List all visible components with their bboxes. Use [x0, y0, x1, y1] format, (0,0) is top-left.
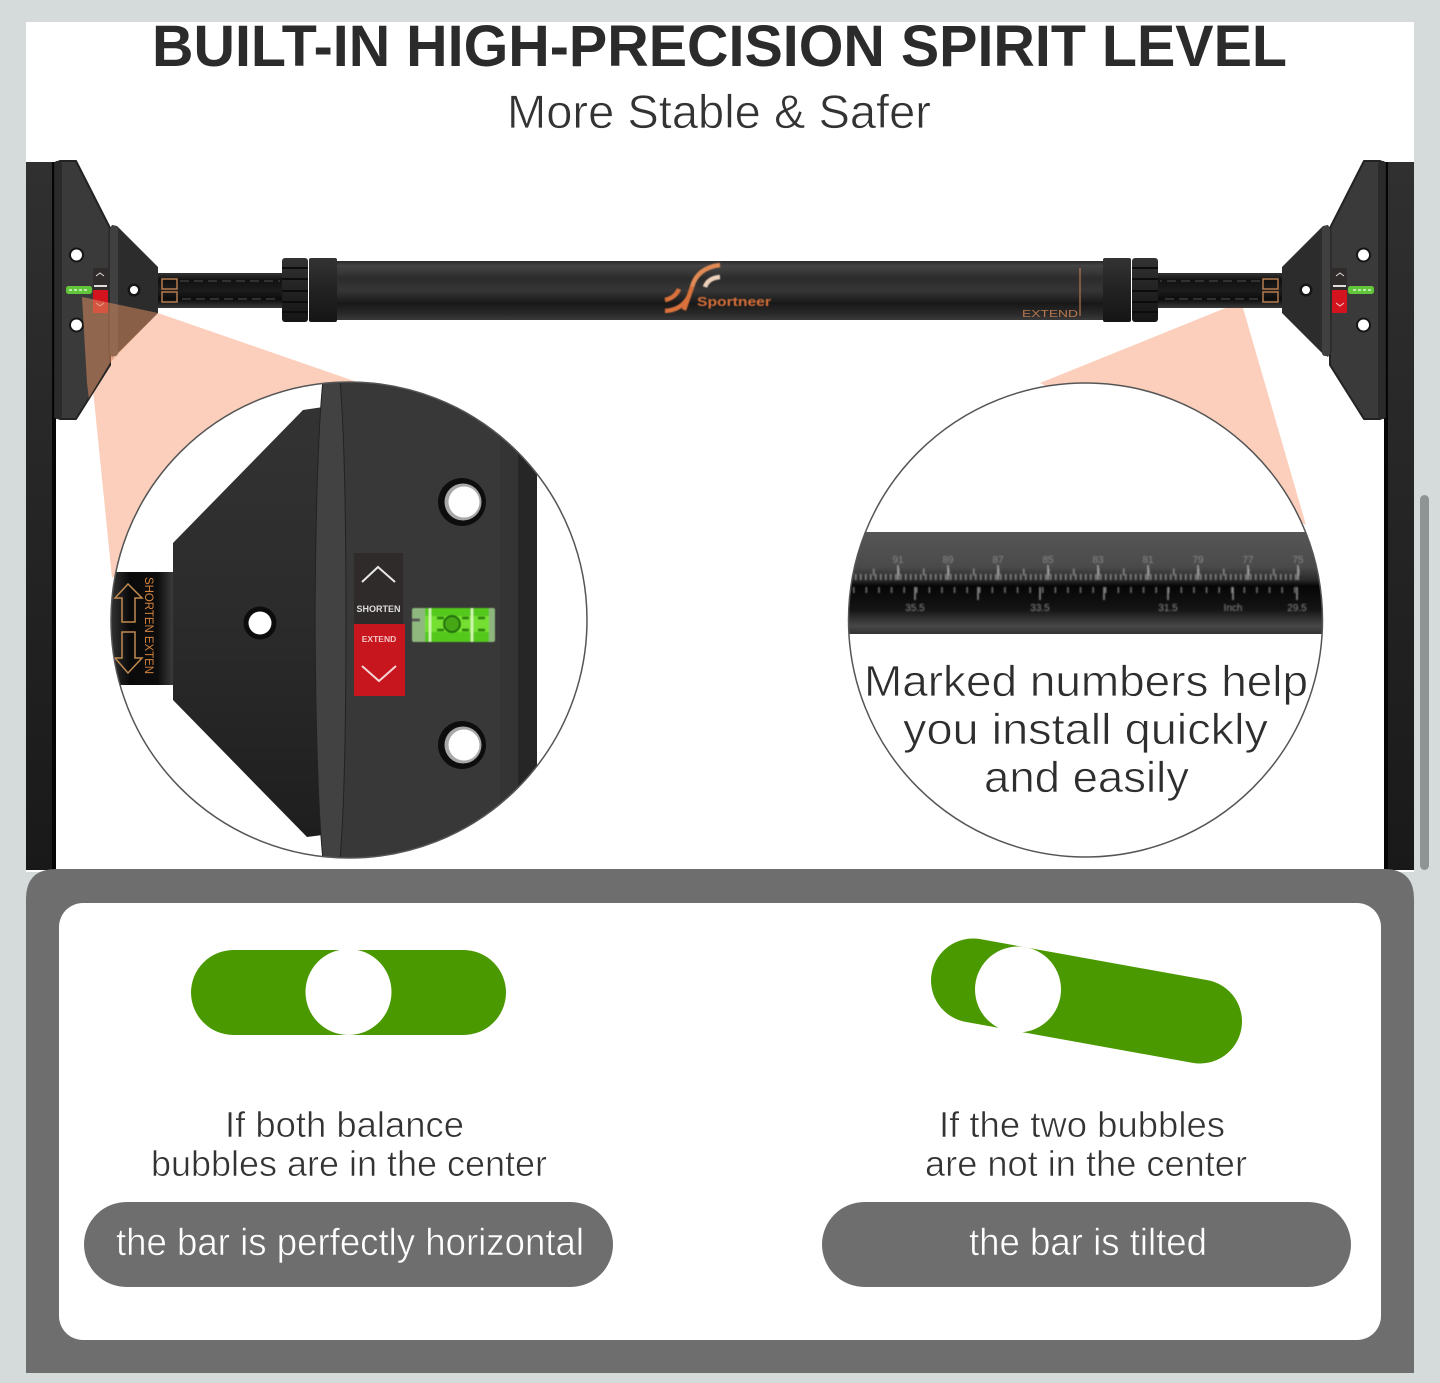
cone: [173, 406, 330, 837]
magnifier caption: and easily: [984, 753, 1189, 802]
icon: level bubble centred: [191, 949, 506, 1035]
left rod and collar: [158, 258, 337, 322]
shorten label: [354, 553, 403, 624]
ruler ticks: [850, 565, 1300, 600]
ruler upper scale: 87: [992, 555, 1004, 566]
panel: left magnifier: [110, 380, 587, 860]
ruler lower scale: 29.5: [1287, 603, 1307, 614]
text: tilted condition: If the two bubbles: [939, 1104, 1225, 1145]
brand logo: Sportneer: [697, 294, 771, 309]
extend label: EXTEND: [362, 634, 396, 644]
result pill: tilted: [822, 1202, 1351, 1287]
ruler upper scale: 91: [892, 555, 904, 566]
text: balanced condition: bubbles are in the center: [151, 1143, 547, 1184]
ruler lower scale: Inch: [1224, 603, 1242, 614]
mount plate: [340, 382, 500, 858]
ruler upper scale: 81: [1142, 555, 1154, 566]
extend label: [354, 624, 405, 696]
pull-up bar: [26, 161, 1414, 870]
right wall mount: [1282, 161, 1414, 870]
centre hole: [244, 606, 276, 640]
left wall mount: [26, 161, 158, 870]
scrollbar: [1420, 495, 1429, 870]
ruler upper scale: 77: [1242, 555, 1254, 566]
ruler upper scale: 75: [1292, 555, 1304, 566]
ruler upper scale: 85: [1042, 555, 1054, 566]
ruler tube: [845, 532, 1327, 634]
ruler lower scale: [905, 603, 1308, 612]
magnifier caption: Marked numbers help: [864, 657, 1308, 706]
rod in magnifier: SHORTEN EXTEN: [142, 577, 156, 674]
rod in magnifier: [110, 572, 176, 685]
ruler lower scale: 31.5: [1158, 603, 1178, 614]
text: tilted condition: are not in the center: [925, 1143, 1247, 1184]
ruler upper scale: 89: [942, 555, 954, 566]
lower bolt: [438, 721, 486, 769]
result pill: tilted: the bar is tilted: [969, 1222, 1207, 1264]
text: balanced condition: If both balance: [225, 1104, 464, 1145]
subtitle: More Stable & Safer: [507, 85, 931, 138]
callout beam: right: [1040, 307, 1306, 525]
text: tilted condition: [925, 1104, 1247, 1184]
ruler upper scale: 79: [1192, 555, 1204, 566]
flange: [315, 380, 346, 860]
title: BUILT-IN HIGH-PRECISION SPIRIT LEVEL: [152, 14, 1287, 79]
result pill: horizontal: [84, 1202, 613, 1287]
white product panel: [26, 22, 1414, 872]
beam overlay on left mount: [82, 297, 158, 398]
callout beam: left: [84, 300, 360, 578]
ruler upper scale: 83: [1092, 555, 1104, 566]
upper bolt: [438, 478, 486, 526]
ruler upper scale: [892, 556, 1304, 564]
result pill: horizontal: the bar is perfectly horizontal: [116, 1222, 584, 1264]
magnifier caption: you install quickly: [903, 705, 1268, 754]
extend marker: EXTEND: [1022, 309, 1078, 320]
magnifier caption: [864, 657, 1308, 802]
main tube: [337, 261, 1103, 320]
icon: level bubble tilted: [973, 946, 1200, 1032]
brand logo: [665, 265, 771, 311]
right rod and collar: [1103, 258, 1282, 322]
panel: right magnifier: [845, 383, 1327, 857]
ruler lower scale: 35.5: [905, 603, 925, 614]
shorten label: SHORTEN: [356, 604, 401, 614]
text: balanced condition: [151, 1104, 547, 1184]
ruler lower scale: 33.5: [1030, 603, 1050, 614]
extend marker: [1022, 268, 1080, 320]
spirit level vial: [412, 608, 495, 642]
panel: bubble guide: [26, 869, 1414, 1373]
